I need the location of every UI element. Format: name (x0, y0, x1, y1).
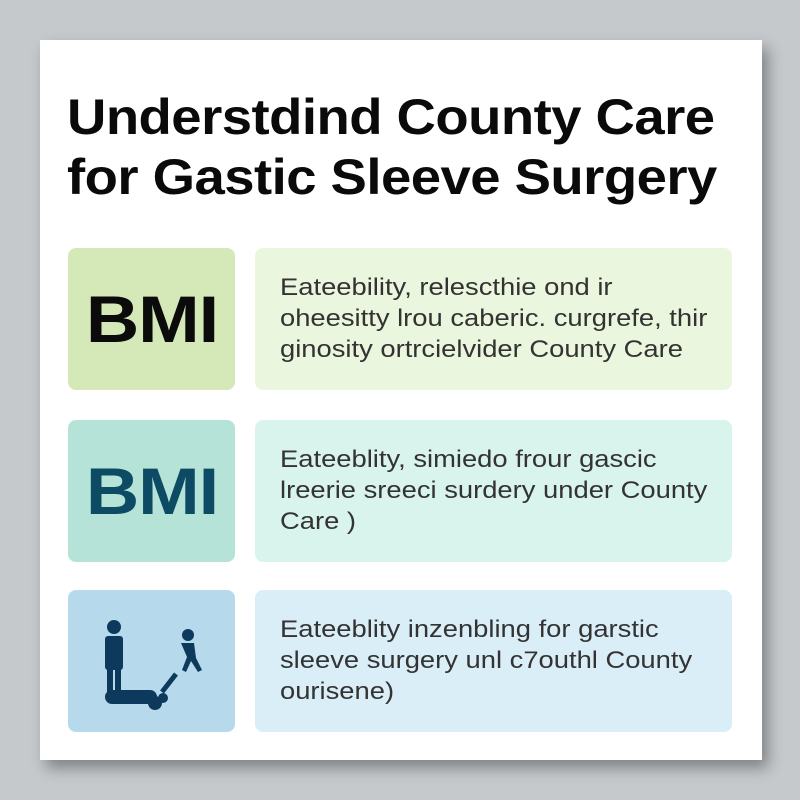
row 3 text: ourisene) (280, 678, 394, 705)
row 2 left: BMI (68, 420, 235, 562)
row 2 left: BMI: BMI (85, 454, 218, 528)
row 1 text: Eateebility, relescthie ond ir (280, 274, 613, 301)
row 2 text: lreerie sreeci surdery under County (280, 477, 707, 504)
icon: people (105, 620, 202, 710)
row 2 text: Eateeblity, simiedo frour gascic (280, 446, 657, 473)
title: for Gastic Sleeve Surgery (67, 149, 717, 205)
row 1 left: BMI: BMI (85, 282, 218, 356)
row 1 text (255, 248, 732, 390)
row 2 text (255, 420, 732, 562)
row 1 text: ginosity ortrcielvider County Care (280, 336, 683, 363)
row 1 left: BMI (68, 248, 235, 390)
row 3 text: sleeve surgery unl c7outhl County (280, 647, 692, 674)
row 3 text: Eateeblity inzenbling for garstic (280, 616, 659, 643)
row 1 text: oheesitty lrou caberic. curgrefe, thir (280, 305, 707, 332)
row 3 left: icon (68, 590, 235, 732)
title (67, 89, 717, 205)
title: Understdind County Care (67, 89, 715, 145)
row 3 text (255, 590, 732, 732)
row 2 text: Care ) (280, 508, 356, 535)
